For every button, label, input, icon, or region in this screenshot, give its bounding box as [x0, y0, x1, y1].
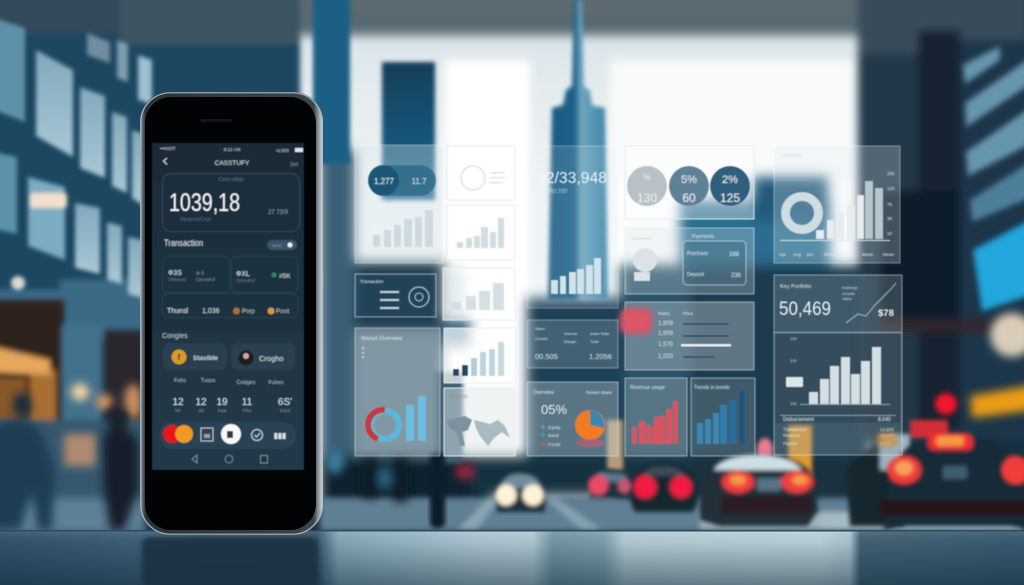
smartphone [140, 92, 323, 535]
panel: donut and white bars: 162 [887, 171, 895, 176]
contacts section: f [178, 353, 181, 362]
panel: value lines: 1,020 [658, 354, 674, 360]
cyan billboard [973, 218, 1024, 311]
android navigation buttons [192, 455, 268, 463]
bottom action bar [159, 422, 296, 449]
panel: bars with stat pill: 11.7 [412, 177, 427, 186]
panel: rising bars [444, 328, 515, 383]
panel: light bar chart [447, 205, 515, 260]
panel: donut and white bars: Apr [779, 252, 787, 257]
stats row: Flex [243, 408, 252, 413]
panel: emblem and table: 236 [731, 273, 742, 279]
side light streaks [607, 420, 948, 483]
panel: 05% with pie: Overview [533, 390, 554, 396]
mid-distance buildings [320, 150, 1024, 516]
panel: bars with stat pill: 1,277 [374, 177, 395, 186]
right street lights [970, 313, 1024, 418]
panel: pale bar chart [443, 268, 515, 320]
phone body [140, 92, 323, 535]
phone reflection [142, 537, 318, 585]
transaction grid: Thunsl [167, 308, 188, 315]
status bar: 9:12 AM [224, 147, 241, 152]
panel: 50,409 with bar chart: $78 [878, 308, 894, 319]
transaction heading and toggle: Transaction [164, 238, 203, 248]
transaction grid: #5K [279, 273, 291, 280]
panel: bars with stat pill [355, 145, 443, 263]
contacts section [162, 333, 295, 370]
stats row: 12 [195, 397, 207, 408]
panel: donut and white bars: Mean [862, 252, 874, 257]
bottom action bar: ▮▮▮ [274, 431, 286, 440]
panel: donut and bars [355, 328, 440, 456]
panel: three percentage circles [625, 146, 754, 219]
panel: three percentage circles: 130 [637, 191, 657, 205]
status bar: •••NIOT [160, 146, 176, 151]
panel: 50,409 with bar chart: Value [842, 296, 853, 301]
contacts section: Stavible [193, 355, 218, 362]
panel: data table: Volume [564, 331, 578, 336]
stats row: 6S' [278, 397, 292, 408]
distant towers [313, 0, 608, 462]
panel: 50,409 with bar chart: Key Portfolio [780, 284, 811, 290]
panel: donut and white bars: Jun [806, 252, 814, 257]
stats row [172, 378, 292, 413]
transaction grid [162, 256, 298, 318]
panel: 50,409 with bar chart: 8,040 [878, 417, 891, 423]
panel: value lines [620, 302, 754, 370]
transaction grid: Porp [242, 309, 255, 315]
panel: donut and white bars: Mean [883, 252, 895, 257]
panel: 05% with pie: Bond [548, 433, 559, 438]
panel: donut and white bars: 10 [887, 231, 893, 236]
panel: three percentage circles: 2% [722, 174, 738, 186]
panel: emblem and table: Purchase [687, 251, 708, 257]
phone screen [152, 143, 304, 470]
panel: data table: Margin [564, 339, 576, 344]
panel: data table: Index Rate [590, 331, 610, 336]
right building [858, 0, 1024, 440]
panel: data table: Growth [535, 336, 548, 341]
panel: 50,409 with bar chart: Growth [842, 291, 855, 296]
traffic cars [496, 420, 1024, 530]
stats row: Fuhes [268, 380, 284, 386]
transaction grid: 1,036 [202, 308, 220, 315]
panel: 50,409 with bar chart: Reserve [783, 433, 800, 438]
panel: data table: Total [590, 339, 599, 344]
panel: three percentage circles: 5% [681, 174, 697, 186]
panel: gauge card [447, 146, 515, 200]
panel: value lines: Rates [658, 311, 671, 316]
panel: blue bar chart [691, 378, 755, 456]
panel: data table [527, 320, 618, 368]
panel: donut and white bars: Overview [781, 153, 802, 159]
panel: world map [444, 388, 515, 456]
app header [164, 158, 299, 168]
panel: emblem and table: Payments [692, 234, 715, 240]
panel: donut and white bars: 120 [887, 186, 895, 191]
panel: 05% with pie: Funds [548, 442, 561, 447]
panel: lines and wheel [355, 274, 436, 317]
panel: large value with bars: 27/57,7/37 [544, 189, 568, 195]
status bar [160, 146, 303, 153]
panel: emblem and table: 168 [729, 252, 740, 258]
app header: CASSTUFY [215, 160, 250, 167]
panel: donut and white bars [774, 146, 900, 263]
balance card: Cest uttap [218, 177, 244, 183]
stats row: Hir [175, 408, 181, 413]
stats row: Sotot [280, 408, 291, 413]
status bar: ▪1:500 [276, 148, 289, 153]
transaction grid: Ctrictal/of [196, 277, 216, 282]
panel: donut and white bars: 38 [887, 216, 893, 221]
stats row: Codges [237, 380, 256, 386]
panel: data table: Value [535, 326, 546, 331]
stats row: 12 [172, 397, 184, 408]
panel: 05% with pie [527, 382, 618, 456]
panel: 50,409 with bar chart: 50,469 [779, 299, 831, 320]
panel: 50,409 with bar chart: Transaction [783, 427, 807, 432]
panel: value lines: 1,809 [658, 321, 674, 327]
car: distant red lights [588, 470, 632, 498]
transaction grid: Posit [276, 309, 290, 315]
panel: donut and white bars: Aug [793, 252, 802, 257]
panel: bars with stat pill: Portfolio [361, 153, 380, 159]
panel: value lines: 1,570 [658, 342, 674, 348]
left storefront [0, 300, 144, 535]
transaction heading and toggle [164, 238, 297, 250]
panel: three percentage circles: 60 [682, 191, 696, 205]
panel: blue bar chart: Trends in bonds [694, 385, 730, 391]
stats row: Fuhs [174, 378, 186, 384]
car: dark SUV left behind [846, 434, 910, 526]
panel: 50,409 with bar chart: 12,340 [880, 433, 894, 438]
panel: data table: 00.505 [535, 352, 558, 361]
left building windows [0, 18, 152, 298]
transaction grid: Ф 5 [196, 271, 204, 277]
panel: donut and white bars: 75 [887, 202, 893, 207]
balance card: 1039,18 [169, 189, 240, 217]
balance card: Heutsr/o/Cest [180, 217, 211, 223]
transaction grid: Chinimat [168, 277, 187, 282]
panel: 50,409 with bar chart: 14,500 [880, 427, 894, 432]
holographic dashboard panels [355, 145, 902, 456]
panel: emblem and table: Deposit [687, 272, 705, 278]
panel: donut and bars: Market Overview [361, 336, 402, 342]
panel: data table: 1.2056 [589, 352, 612, 361]
stats row: 19 [216, 397, 228, 408]
transaction grid: Ф3S [168, 270, 182, 277]
panel: emblem and table [625, 228, 754, 294]
transaction grid: Ctrictalnd [236, 278, 256, 283]
stats row: Inpa [218, 408, 227, 413]
panel: value lines: Price [683, 311, 694, 316]
panel: 50,409 with bar chart: 100 [790, 358, 797, 363]
panel: value lines: 1,909 [658, 331, 674, 337]
car: dark SUV rear [880, 433, 1024, 530]
panel: 50,409 with bar chart: 100 [790, 336, 797, 341]
panel: three percentage circles: % [643, 173, 651, 182]
panel: large value with bars [527, 146, 618, 308]
car: black sedan [630, 463, 698, 512]
transaction grid: ФXL [236, 271, 250, 278]
contacts section: Crogho [259, 354, 284, 363]
car: silver rear [700, 454, 818, 526]
stats row: 11 [242, 397, 253, 408]
panel: 50,409 with bar chart: Payout [783, 441, 798, 446]
panel: large value with bars: 92/33,948 [537, 170, 607, 187]
panel: three percentage circles: 125 [720, 191, 740, 205]
car: oncoming white headlights [496, 472, 545, 512]
panel: 05% with pie: Return share [586, 390, 613, 395]
sky [280, 0, 870, 500]
pedestrians [0, 393, 475, 530]
panel: 50,409 with bar chart: Holdings [842, 285, 858, 290]
panel: donut and white bars: Month [824, 252, 837, 257]
right building windows [963, 46, 1024, 222]
panel: 50,409 with bar chart: 9,870 [880, 441, 892, 446]
panel: 50,409 with bar chart [774, 275, 902, 455]
table surface [0, 530, 1024, 585]
transaction heading and toggle: Next [272, 243, 282, 248]
app header: Set [290, 162, 299, 168]
panel: red bar chart: Revenue usage [630, 385, 665, 391]
panel: emblem and table: Overview [632, 236, 652, 241]
balance card [162, 174, 300, 232]
stats row: Jul [198, 408, 204, 413]
balance card: 27 73/9 [268, 210, 289, 216]
panel: 50,409 with bar chart: Disbursement [783, 417, 814, 423]
panel: 05% with pie: Equity [548, 425, 561, 430]
panel: red bar chart [625, 378, 687, 456]
panel: lines and wheel: Transaction [360, 279, 384, 284]
left building base [0, 0, 300, 340]
street [320, 498, 1024, 531]
panel: world map: Regions [449, 394, 468, 400]
panel: 50,409 with bar chart: 100 [790, 401, 797, 406]
panel: 05% with pie: 05% [541, 402, 567, 417]
stats row: Tvass [201, 378, 216, 384]
contacts section: Congies [162, 333, 188, 340]
